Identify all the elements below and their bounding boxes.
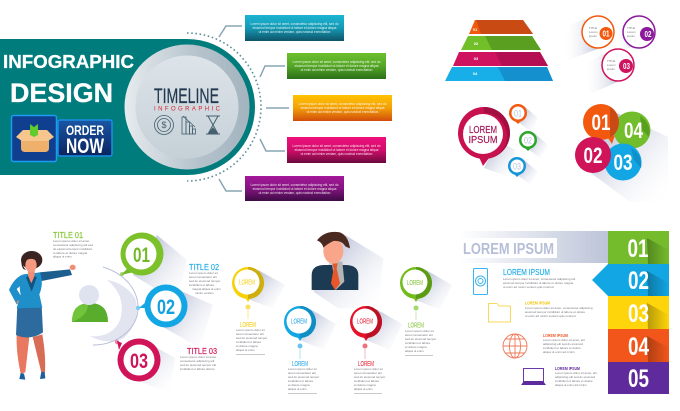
- banner background: [0, 39, 255, 175]
- icon: laptop: [521, 368, 546, 385]
- title 02 block: [189, 263, 221, 295]
- badge 01: Lorem: [589, 30, 598, 34]
- item 04 text: LOREM IPSUM: [543, 333, 568, 338]
- pin: red: [350, 306, 402, 394]
- item 04 text: [543, 333, 585, 354]
- pin: green: incididunt ut labore: [405, 341, 431, 345]
- title 02 block: TITLE 02: [189, 263, 219, 272]
- pin: red: aliqua ut enim: [354, 387, 373, 391]
- text box 5: purple: ut enim ad minim veniam, quis nostrud exercitation: [259, 191, 331, 195]
- pin: blue: aliqua ut enim: [288, 387, 307, 391]
- item 04 text: incididunt ut labore et dolore: [543, 346, 581, 350]
- pin: blue: et dolore magna: [288, 383, 310, 387]
- title 01 block: Lorem ipsum dolor sit amet,: [53, 239, 90, 243]
- row 02: 02: [628, 267, 649, 295]
- text box 1: teal: Lorem ipsum dolor sit amet, consectetur adipiscing elit, sed do: [250, 22, 339, 26]
- text box 2: green: eiusmod tempor incididunt ut labore et dolore magna aliqua: [295, 64, 379, 68]
- pin: green: amet consectetur elit: [405, 333, 433, 337]
- badge 02: Lorem: [627, 30, 636, 34]
- badge 03: ipsum: [607, 67, 616, 71]
- badge 03: TITLE: [607, 59, 615, 63]
- pin: yellow: [232, 267, 285, 354]
- small bubble 01: 01: [514, 108, 522, 118]
- pin: yellow: LOREM: [240, 322, 256, 329]
- row 03: [608, 296, 669, 329]
- title 03 block: [180, 347, 217, 371]
- badge 02: 02: [644, 30, 652, 39]
- title 02 block: minim veniam: [195, 291, 214, 295]
- pin: red: Lorem ipsum dolor sit: [354, 367, 383, 371]
- shadows: [484, 106, 548, 184]
- title 02 block: amet consectetur elit: [189, 275, 217, 279]
- badge 02: 02: [157, 296, 175, 319]
- pin: blue: LOREM: [292, 361, 308, 368]
- panel: pyramid: [445, 20, 553, 81]
- row 04: [608, 329, 669, 362]
- circle 03: 03: [614, 150, 632, 175]
- text box 1: teal: [245, 15, 344, 41]
- pin: yellow: Lorem ipsum dolor sit: [236, 328, 265, 332]
- item 05 text: LOREM IPSUM: [555, 366, 580, 371]
- title 01 block: aliqua ut enim: [53, 254, 72, 258]
- panel: team pins: [232, 232, 452, 394]
- title 02 block: Lorem ipsum dolor sit: [189, 271, 218, 275]
- row 01: 01: [628, 235, 649, 263]
- text box 3: amber: ut enim ad minim veniam, quis nostrud exercitation: [307, 110, 379, 114]
- badge 03: [117, 338, 175, 393]
- icon: folder: [488, 304, 510, 322]
- long shadow: [587, 113, 668, 202]
- text box 1: teal: ut enim ad minim veniam, quis nostrud exercitation: [259, 30, 331, 34]
- panel: lorem bubbles: [458, 104, 548, 184]
- pin: yellow: et dolore magna: [236, 344, 258, 348]
- text box 4: magenta: ut enim ad minim veniam, quis nostrud exercitation: [301, 152, 373, 156]
- title 01 block: do eiusmod tempor incididunt: [53, 247, 92, 251]
- pin: red: et dolore magna: [354, 383, 376, 387]
- badge 02: [139, 284, 213, 348]
- text box 3: amber: eiusmod tempor incididunt ut labore et dolore magna aliqua: [301, 106, 385, 110]
- icon: falling bar chart: [182, 116, 196, 134]
- large bubble: IPSUM: [468, 135, 498, 146]
- pin: green: Lorem ipsum dolor sit: [405, 329, 434, 333]
- text box 5: purple: eiusmod tempor incididunt ut labore et dolore magna aliqua: [253, 187, 337, 191]
- pin: blue: amet consectetur elit: [288, 371, 316, 375]
- panel: ring badges: [563, 16, 655, 94]
- title 02 block: sed do eiusmod tempor: [189, 279, 220, 283]
- item 02 text: ut enim ad minim veniam quis nostrud: [503, 285, 554, 289]
- panel: numbered list: [460, 231, 669, 394]
- large bubble: [458, 107, 510, 166]
- badge 01: [582, 16, 614, 48]
- badge 03: [602, 49, 634, 81]
- badge 03: Lorem: [607, 63, 616, 67]
- badge 01: TITLE: [589, 26, 597, 30]
- badge 01: ipsum: [589, 34, 598, 38]
- connectors: [219, 26, 289, 191]
- item 05 text: aliqua ut enim ad minim: [555, 383, 587, 387]
- item 04 text: adipiscing elit sed do eiusmod: [543, 342, 583, 346]
- title 01 block: ut labore et dolore magna: [53, 251, 88, 255]
- item 02 text: Lorem ipsum dolor sit amet, consectetur adipiscing elit: [503, 277, 575, 281]
- title 03 block: Lorem ipsum dolor sit amet: [180, 355, 216, 359]
- pin: yellow: aliqua ut enim: [236, 348, 255, 352]
- panel: timeline banner: [0, 33, 261, 181]
- text box 4: magenta: [287, 137, 386, 163]
- badge 02: [623, 16, 655, 48]
- infographic subtitle: INFOGRAPHIC: [154, 106, 221, 112]
- title 01 block: consectetur adipiscing elit sed: [53, 243, 93, 247]
- pin: yellow: amet consectetur elit: [236, 332, 264, 336]
- title 01 block: [53, 231, 93, 258]
- circle 01: 01: [592, 110, 610, 135]
- item 03 text: LOREM IPSUM: [525, 300, 550, 306]
- item 03 text: [525, 300, 593, 318]
- title 02 block: incididunt ut labore: [189, 283, 215, 287]
- pin: red: LOREM: [358, 361, 374, 368]
- item 05 text: Lorem ipsum dolor sit amet, elit: [555, 371, 597, 375]
- pin: blue: incididunt ut labore: [288, 379, 314, 383]
- icon: parcel box: [16, 124, 54, 152]
- small bubble 03: 03: [513, 162, 521, 172]
- pin: red: LOREM: [357, 318, 373, 326]
- pin: green: sed do eiusmod tempor: [405, 337, 436, 341]
- text box 3: amber: [293, 95, 392, 121]
- headline: design: DESIGN: [10, 78, 113, 108]
- button: order now: [12, 116, 112, 162]
- item 05 text: [555, 366, 597, 387]
- panel: presenter infographic: [9, 231, 221, 393]
- icon: person: [72, 285, 108, 322]
- badge 02: ipsum: [627, 34, 636, 38]
- drop shadows: [563, 16, 642, 94]
- item 04 text: Lorem ipsum dolor sit amet, elit: [543, 338, 585, 342]
- title 02 block: magna aliqua ut enim: [192, 287, 221, 291]
- row 05: [608, 362, 669, 394]
- small bubble 02: 02: [524, 136, 532, 146]
- pyramid layer 4: 04: [473, 71, 478, 76]
- pin: blue: [284, 306, 336, 394]
- illustration: presenter woman: [9, 251, 76, 380]
- item 02 text: LOREM IPSUM: [503, 268, 550, 277]
- pyramid layer 2: 02: [474, 41, 479, 46]
- pin: green: aliqua ut enim: [405, 349, 424, 353]
- pin: green: et dolore magna: [405, 345, 427, 349]
- row 02: [592, 264, 669, 296]
- badge 03: 03: [623, 62, 630, 71]
- pin: green: [400, 267, 452, 356]
- header band: [460, 231, 608, 263]
- central disc: [124, 44, 250, 170]
- text box 4: magenta: eiusmod tempor incididunt ut labore et dolore magna aliqua: [295, 148, 379, 152]
- text box 4: magenta: Lorem ipsum dolor sit amet, consectetur adipiscing elit, sed do: [292, 144, 381, 148]
- icon: phone: [474, 268, 488, 294]
- item 03 text: ut enim ad minim veniam quis nostrud: [525, 314, 576, 318]
- row 01: [608, 231, 669, 264]
- title 03 block: TITLE 03: [187, 347, 217, 356]
- button: order now: ORDER: [66, 122, 104, 138]
- item 05 text: adipiscing elit sed do eiusmod: [555, 375, 595, 379]
- title 03 block: sed do eiusmod tempor elit: [180, 363, 216, 367]
- circle 04: 04: [624, 118, 644, 143]
- pin: blue: LOREM: [291, 318, 307, 326]
- item 04 text: aliqua ut enim ad minim: [543, 350, 575, 354]
- badge 02: TITLE: [627, 26, 635, 30]
- text box 1: teal: eiusmod tempor incididunt ut labore et dolore magna aliqua: [253, 26, 337, 30]
- pin: yellow: sed do eiusmod tempor: [236, 336, 267, 340]
- pin: red: amet consectetur elit: [354, 371, 382, 375]
- pin: blue: Lorem ipsum dolor sit: [288, 367, 317, 371]
- badge 01: 01: [602, 30, 610, 38]
- icon: dollar coin: $: [161, 120, 167, 130]
- text box 3: amber: Lorem ipsum dolor sit amet, consectetur adipiscing elit, sed do: [298, 102, 387, 106]
- item 05 text: incididunt ut labore et dolore: [555, 379, 593, 383]
- icon: globe: [503, 334, 527, 358]
- circle 02: 02: [584, 143, 602, 168]
- pin: green: LOREM: [408, 322, 424, 330]
- row 04: 04: [628, 333, 649, 361]
- timeline title: TIMELINE: [154, 85, 219, 108]
- header title: LOREM IPSUM: [463, 241, 554, 258]
- text box 2: green: [287, 53, 386, 79]
- badge 01: 01: [133, 244, 150, 267]
- illustration: businessman: [312, 232, 383, 308]
- item 02 text: eiusmod tempor incididunt ut labore et dolore magna: [503, 281, 573, 285]
- pin: red: sed do eiusmod tempor: [354, 375, 385, 379]
- text box 2: green: ut enim ad minim veniam, quis nostrud exercitation: [301, 68, 373, 72]
- item 03 text: Lorem ipsum dolor sit amet, consectetur adipiscing: [525, 306, 593, 310]
- panel: overlapping number circles: [575, 104, 668, 202]
- dotted ring: [187, 33, 261, 181]
- item 03 text: eiusmod tempor incididunt ut labore et dolore: [525, 310, 585, 314]
- pin: red: incididunt ut labore: [354, 379, 380, 383]
- item 02 text: [503, 268, 575, 289]
- row 03: 03: [628, 300, 649, 328]
- text box 5: purple: [245, 176, 344, 201]
- title 03 block: consectetur adipiscing elit: [180, 359, 215, 363]
- curved arc with shadow: [90, 267, 140, 345]
- badge 03: 03: [130, 350, 148, 373]
- title 01 block: TITLE 01: [53, 231, 83, 240]
- large bubble: LOREM: [469, 125, 497, 136]
- pin: blue: sed do eiusmod tempor: [288, 375, 319, 379]
- pin: green: LOREM: [407, 280, 423, 287]
- button: order now: NOW: [66, 135, 104, 158]
- icon: hourglass: [206, 116, 220, 134]
- text box 5: purple: Lorem ipsum dolor sit amet, consectetur adipiscing elit, sed do: [250, 183, 339, 187]
- pin: yellow: LOREM: [239, 280, 255, 286]
- text box 2: green: Lorem ipsum dolor sit amet, consectetur adipiscing elit, sed do: [292, 60, 381, 64]
- pyramid layer 1: 01: [473, 27, 478, 32]
- pyramid layer 3: 03: [474, 56, 479, 61]
- title 03 block: incididunt ut labore dolore: [180, 367, 215, 371]
- headline: infographic: INFOGRAPHIC: [3, 51, 134, 72]
- pin: yellow: incididunt ut labore: [236, 340, 262, 344]
- badge 01: [120, 232, 187, 302]
- row 05: 05: [628, 365, 649, 393]
